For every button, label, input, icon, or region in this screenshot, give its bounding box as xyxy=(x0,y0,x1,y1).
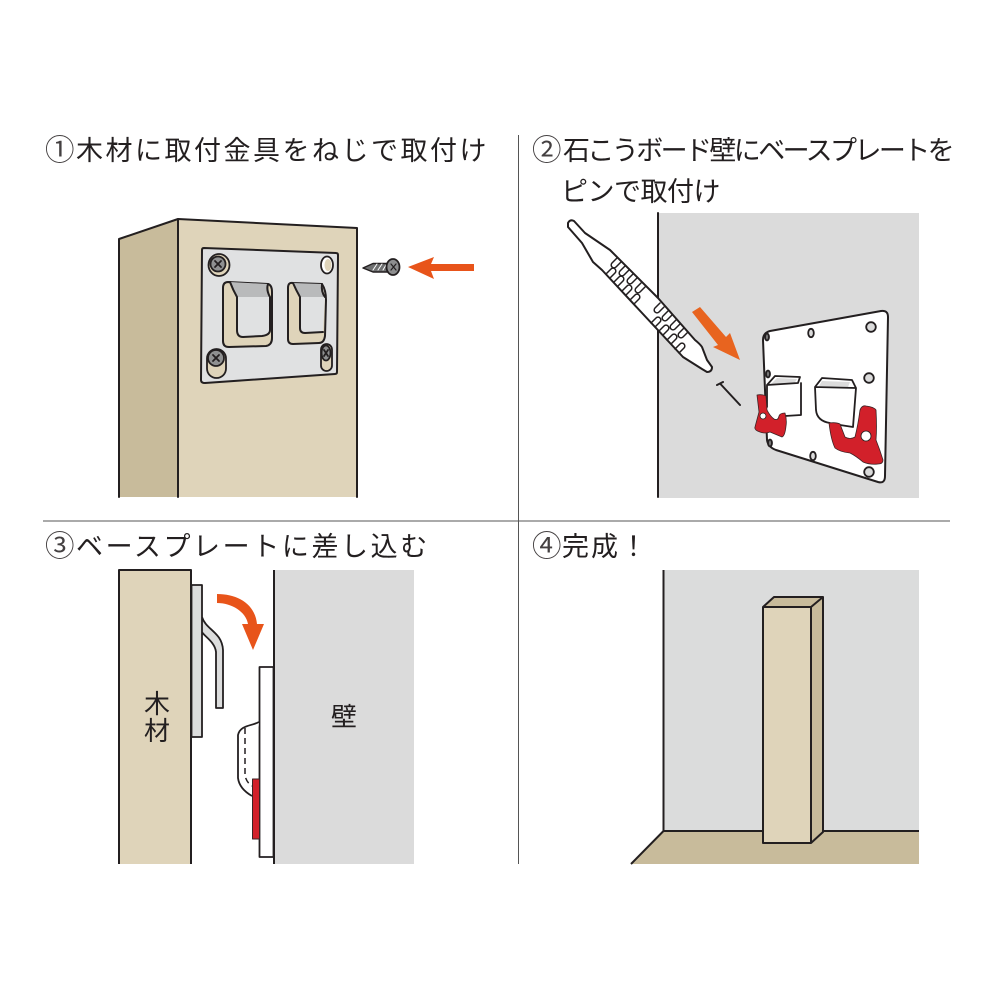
heading: step 3: ベースプレートに差し込む xyxy=(76,532,430,562)
heading: step 1: 木材に取付金具をねじで取付け xyxy=(76,136,489,166)
heading: step 4: ④ xyxy=(532,530,562,563)
wood section xyxy=(119,570,191,864)
panel: step 4 illustration xyxy=(631,570,919,864)
wood section: 材 xyxy=(144,716,170,746)
pin xyxy=(717,382,740,405)
heading: step 2: ② xyxy=(532,134,562,167)
heading: step 4 xyxy=(532,530,649,563)
wood post xyxy=(119,219,357,497)
wall xyxy=(658,213,919,498)
arrow: orange left xyxy=(408,257,474,279)
pin pusher tool xyxy=(568,220,712,372)
heading: step 3: ③ xyxy=(45,530,75,563)
left pocket hook xyxy=(755,376,801,437)
panel: step 2 illustration xyxy=(568,213,919,498)
bracket side view xyxy=(192,585,223,737)
panel: step 3 illustration xyxy=(119,570,414,864)
wall and floor xyxy=(631,570,919,864)
arrow: orange diagonal xyxy=(692,307,740,360)
heading: step 2: ピンで取付け xyxy=(561,177,720,207)
arrow: orange curved xyxy=(217,594,264,650)
heading: step 2: 石こうボード壁にベースプレートを xyxy=(563,136,952,166)
base plate xyxy=(763,311,888,482)
wall section: 壁 xyxy=(331,702,357,732)
wood section: 木 xyxy=(144,689,170,719)
screw xyxy=(363,259,400,275)
base plate section xyxy=(238,667,274,857)
screws in plate xyxy=(207,254,333,378)
heading: step 2 xyxy=(532,134,952,207)
mounting bracket plate xyxy=(201,248,338,383)
finished wood post xyxy=(763,597,823,843)
panel: step 1 illustration xyxy=(119,219,474,497)
right pocket hook xyxy=(815,378,883,464)
wall section xyxy=(274,570,414,864)
heading: step 1: ① xyxy=(45,134,75,167)
heading: step 4: 完成！ xyxy=(562,532,649,562)
